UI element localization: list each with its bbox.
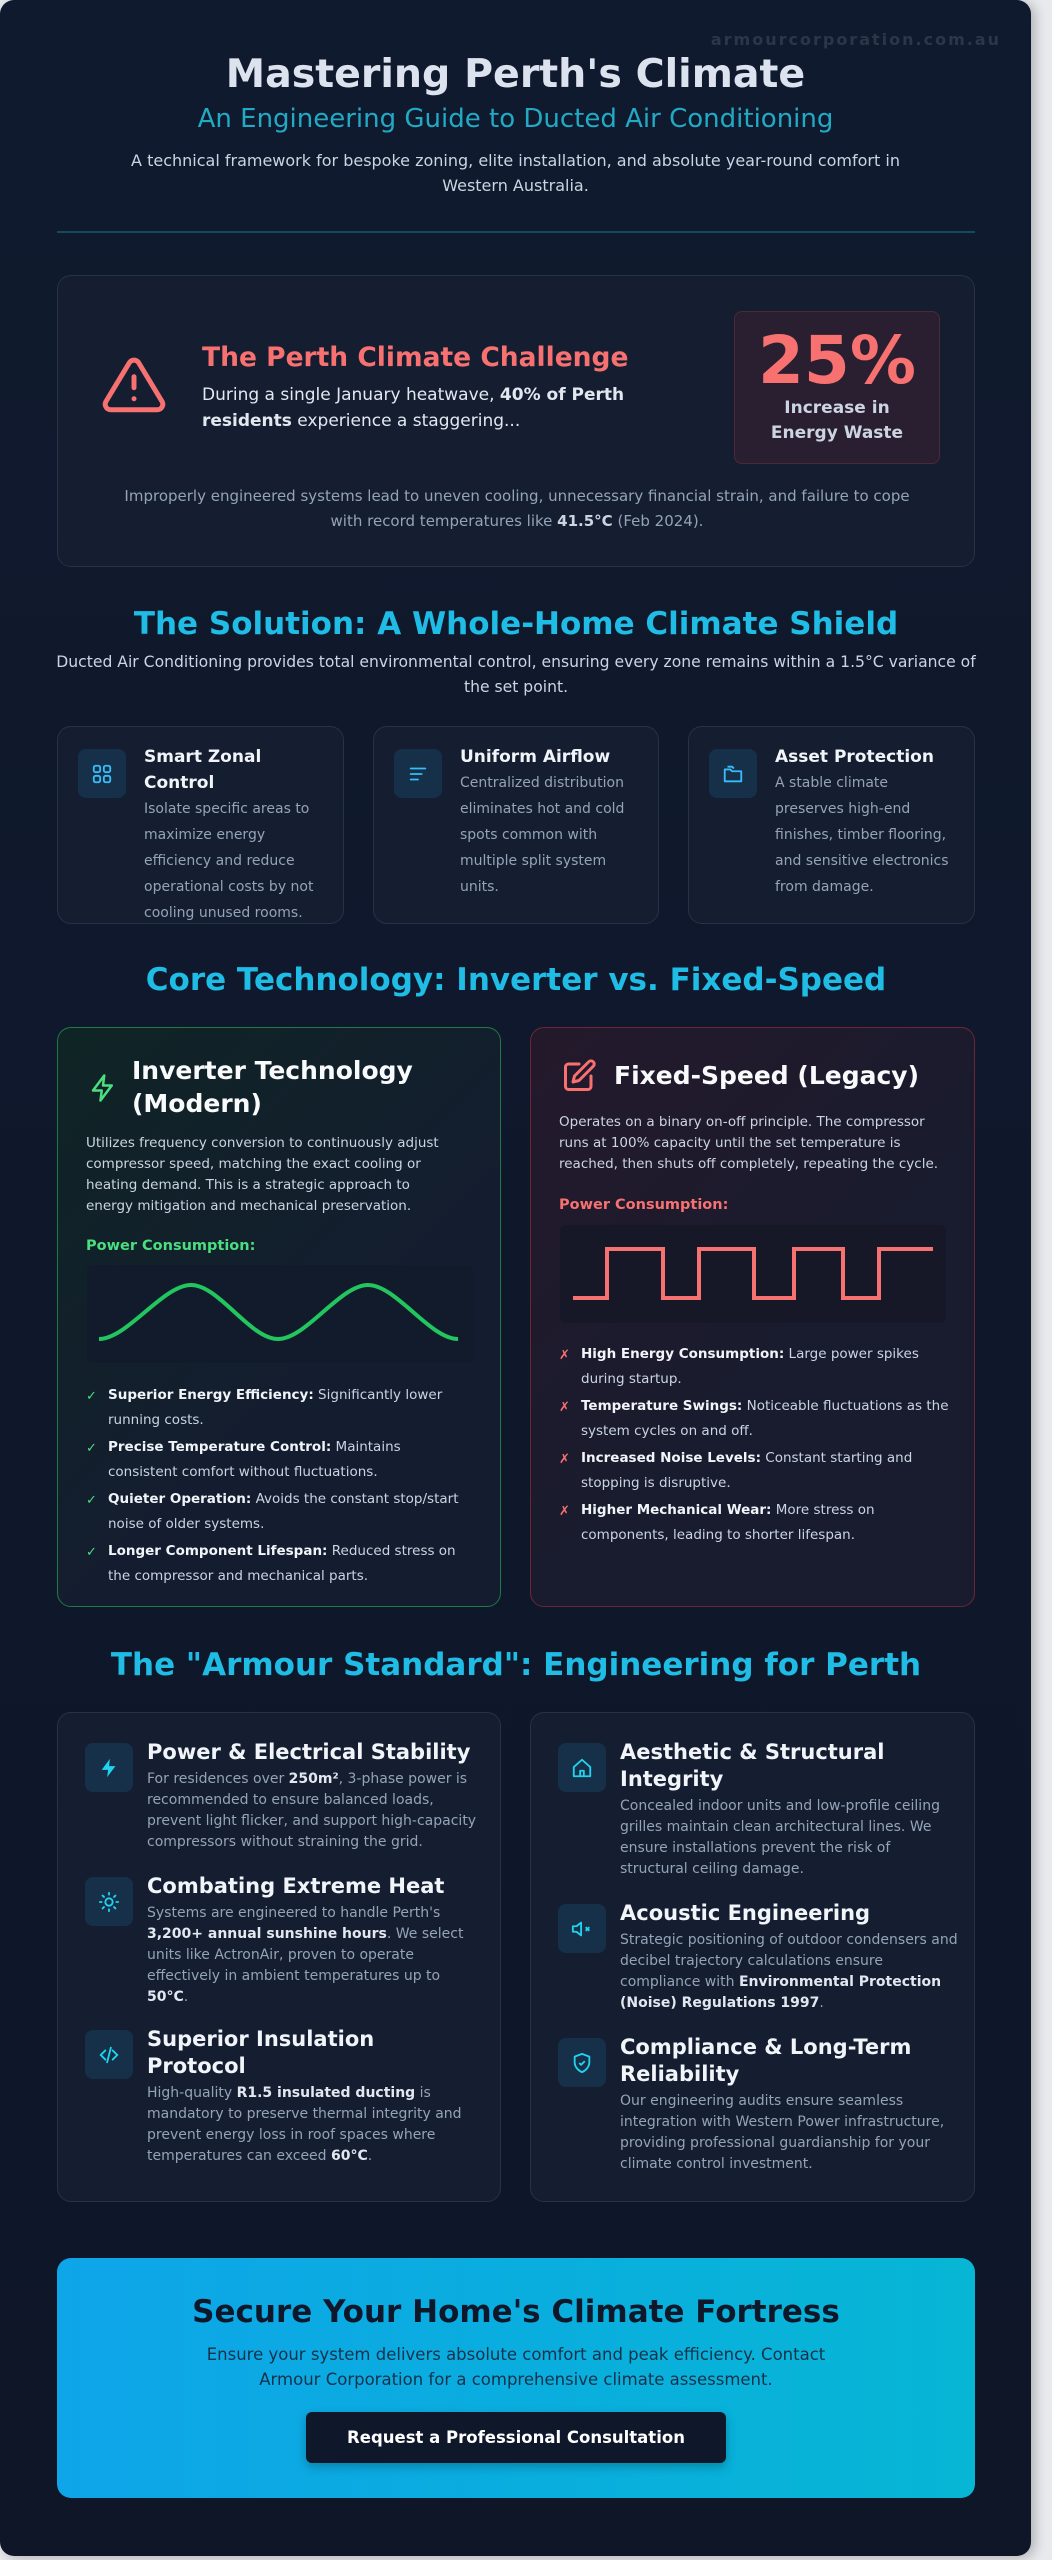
zonal text: Isolate specific areas to maximize energy efficiency and reduce operational costs by not cooling unused rooms. [144,801,313,921]
item: extreme heat: Combating Extreme Heat [147,1874,444,1898]
benefit list: Quieter Operation: Avoids the constant stop/start noise of older systems. [108,1491,458,1532]
challenge heading: The Perth Climate Challenge [202,342,628,373]
item: insulation: Superior Insulation [147,2027,374,2051]
CTA button [306,2412,726,2463]
airflow text: Centralized distribution eliminates hot and cold spots common with multiple split system units. [460,775,624,895]
chart: square wave [560,1225,946,1323]
CTA heading: Secure Your Home's Climate Fortress [192,2294,840,2330]
item: aesthetic [558,1740,940,1877]
CTA text: Ensure your system delivers absolute comfort and peak efficiency. Contact Armour Corporation for a comprehensive climate assessment. [207,2345,825,2389]
inverter description: Utilizes frequency conversion to continuously adjust compressor speed, matching the exact cooling or heating demand. This is a strategic approach to energy mitigation and mechanical preservation. [86,1135,439,1214]
item: compliance: Compliance & Long-Term [620,2035,911,2059]
benefit list: Superior Energy Efficiency: Significantly lower running costs. [108,1387,442,1428]
drawback list: ✗ [559,1504,570,1519]
item: acoustic: Strategic positioning of outdoor condensers and decibel trajectory calculations ensure compliance with Environmental Protection (Noise) Regulations 1997. [620,1932,958,2011]
benefit list: ✓ [86,1389,97,1404]
item: aesthetic: Concealed indoor units and low-profile ceiling grilles maintain clean architectural lines. We ensure installations prevent the risk of structural ceiling damage. [620,1798,940,1877]
item: power stability: For residences over 250m², 3-phase power is recommended to ensure balanced loads, prevent light flicker, and support high-capacity compressors without straining the grid. [147,1771,476,1850]
benefit list: Precise Temperature Control: Maintains consistent comfort without fluctuations. [108,1439,401,1480]
challenge footnote: Improperly engineered systems lead to uneven cooling, unnecessary financial strain, and failure to cope with record temperatures like 41.5°C (Feb 2024). [124,487,910,530]
item: power stability [85,1740,476,1850]
item: insulation: High-quality R1.5 insulated ducting is mandatory to preserve thermal integrity and prevent energy loss in roof spaces where temperatures can exceed 60°C. [147,2085,462,2164]
item: extreme heat: Systems are engineered to handle Perth's 3,200+ annual sunshine hours. We select units like ActronAir, proven to operate effectively in ambient temperatures up to 50°C. [147,1905,463,2005]
panel: climate challenge [57,275,975,567]
solution text: Ducted Air Conditioning provides total environmental control, ensuring every zone remains within a 1.5°C variance of the set point. [56,653,976,696]
CTA panel [57,2258,975,2498]
panel: inverter [57,1027,501,1607]
benefit list: Longer Component Lifespan: Reduced stress on the compressor and mechanical parts. [108,1543,456,1584]
item: power stability: Power & Electrical Stability [147,1740,470,1764]
icon: edit [564,1059,596,1091]
asset text: Asset Protection [775,747,934,767]
heading: core technology: Core Technology: Inverter vs. Fixed-Speed [146,962,886,998]
item: acoustic: Acoustic Engineering [620,1901,870,1925]
drawback list: ✗ [559,1452,570,1467]
stat box 25% [734,311,940,464]
chart: sine wave [87,1265,473,1363]
benefit list: ✓ [86,1441,97,1456]
drawback list [559,1346,948,1543]
airflow text: Uniform Airflow [460,747,610,767]
subtitle: An Engineering Guide to Ducted Air Conditioning [198,104,833,134]
challenge text: During a single January heatwave, 40% of Perth residents experience a staggering... [202,385,624,431]
stat box 25%: Increase in [784,398,890,418]
fixed description: Operates on a binary on-off principle. The compressor runs at 100% capacity until the set temperature is reached, then shuts off completely, repeating the cycle. [559,1114,938,1172]
heading: armour standard: The "Armour Standard": Engineering for Perth [111,1647,921,1683]
item: compliance: Reliability [620,2062,739,2086]
panel: asset protection [688,726,975,924]
watermark: armourcorporation.com.au [711,30,1001,49]
zonal text [144,747,314,921]
item: aesthetic: Aesthetic & Structural [620,1740,884,1764]
item: compliance: Our engineering audits ensure seamless integration with Western Power infrastructure, providing professional guardianship for your climate control investment. [620,2093,944,2172]
drawback list: ✗ [559,1400,570,1415]
benefit list: ✓ [86,1493,97,1508]
label: Power Consumption: [86,1238,255,1254]
panel: fixed speed [530,1027,975,1607]
panel: armour left [57,1712,501,2202]
item: aesthetic: Integrity [620,1767,723,1791]
label: Power Consumption: [559,1197,728,1213]
title: Mastering Perth's Climate [226,51,805,97]
drawback list: Higher Mechanical Wear: More stress on components, leading to shorter lifespan. [581,1502,875,1543]
item: insulation [85,2027,462,2164]
heading: solution: The Solution: A Whole-Home Climate Shield [134,606,898,642]
icon: grid [78,749,126,798]
inverter title: (Modern) [132,1089,262,1118]
drawback list: ✗ [559,1348,570,1363]
stat box 25%: Energy Waste [771,423,903,443]
stat box 25%: 25% [758,322,916,399]
item: insulation: Protocol [147,2054,246,2078]
intro text: A technical framework for bespoke zoning, elite installation, and absolute year-round comfort in Western Australia. [131,151,900,195]
panel: smart zonal control [57,726,344,924]
inverter title: Inverter Technology [132,1056,413,1085]
fixed title: Fixed-Speed (Legacy) [614,1061,919,1090]
inverter title [132,1056,413,1118]
asset text: A stable climate preserves high-end finishes, timber flooring, and sensitive electronics from damage. [775,775,949,895]
drawback list: Increased Noise Levels: Constant starting and stopping is disruptive. [581,1450,912,1491]
drawback list: High Energy Consumption: Large power spikes during startup. [581,1346,919,1387]
icon: warning [102,358,166,412]
item: acoustic [558,1901,958,2011]
benefit list [86,1387,458,1584]
panel: uniform airflow [373,726,659,924]
icon: bolt [92,1074,113,1102]
drawback list: Temperature Swings: Noticeable fluctuations as the system cycles on and off. [581,1398,948,1439]
panel: armour right [530,1712,975,2202]
item: extreme heat [85,1874,464,2005]
benefit list: ✓ [86,1545,97,1560]
item: compliance [558,2035,944,2172]
icon: lines [394,749,442,798]
zonal text: Smart Zonal Control [144,747,261,793]
CTA button: Request a Professional Consultation [347,2428,685,2447]
icon: folder [709,749,757,798]
